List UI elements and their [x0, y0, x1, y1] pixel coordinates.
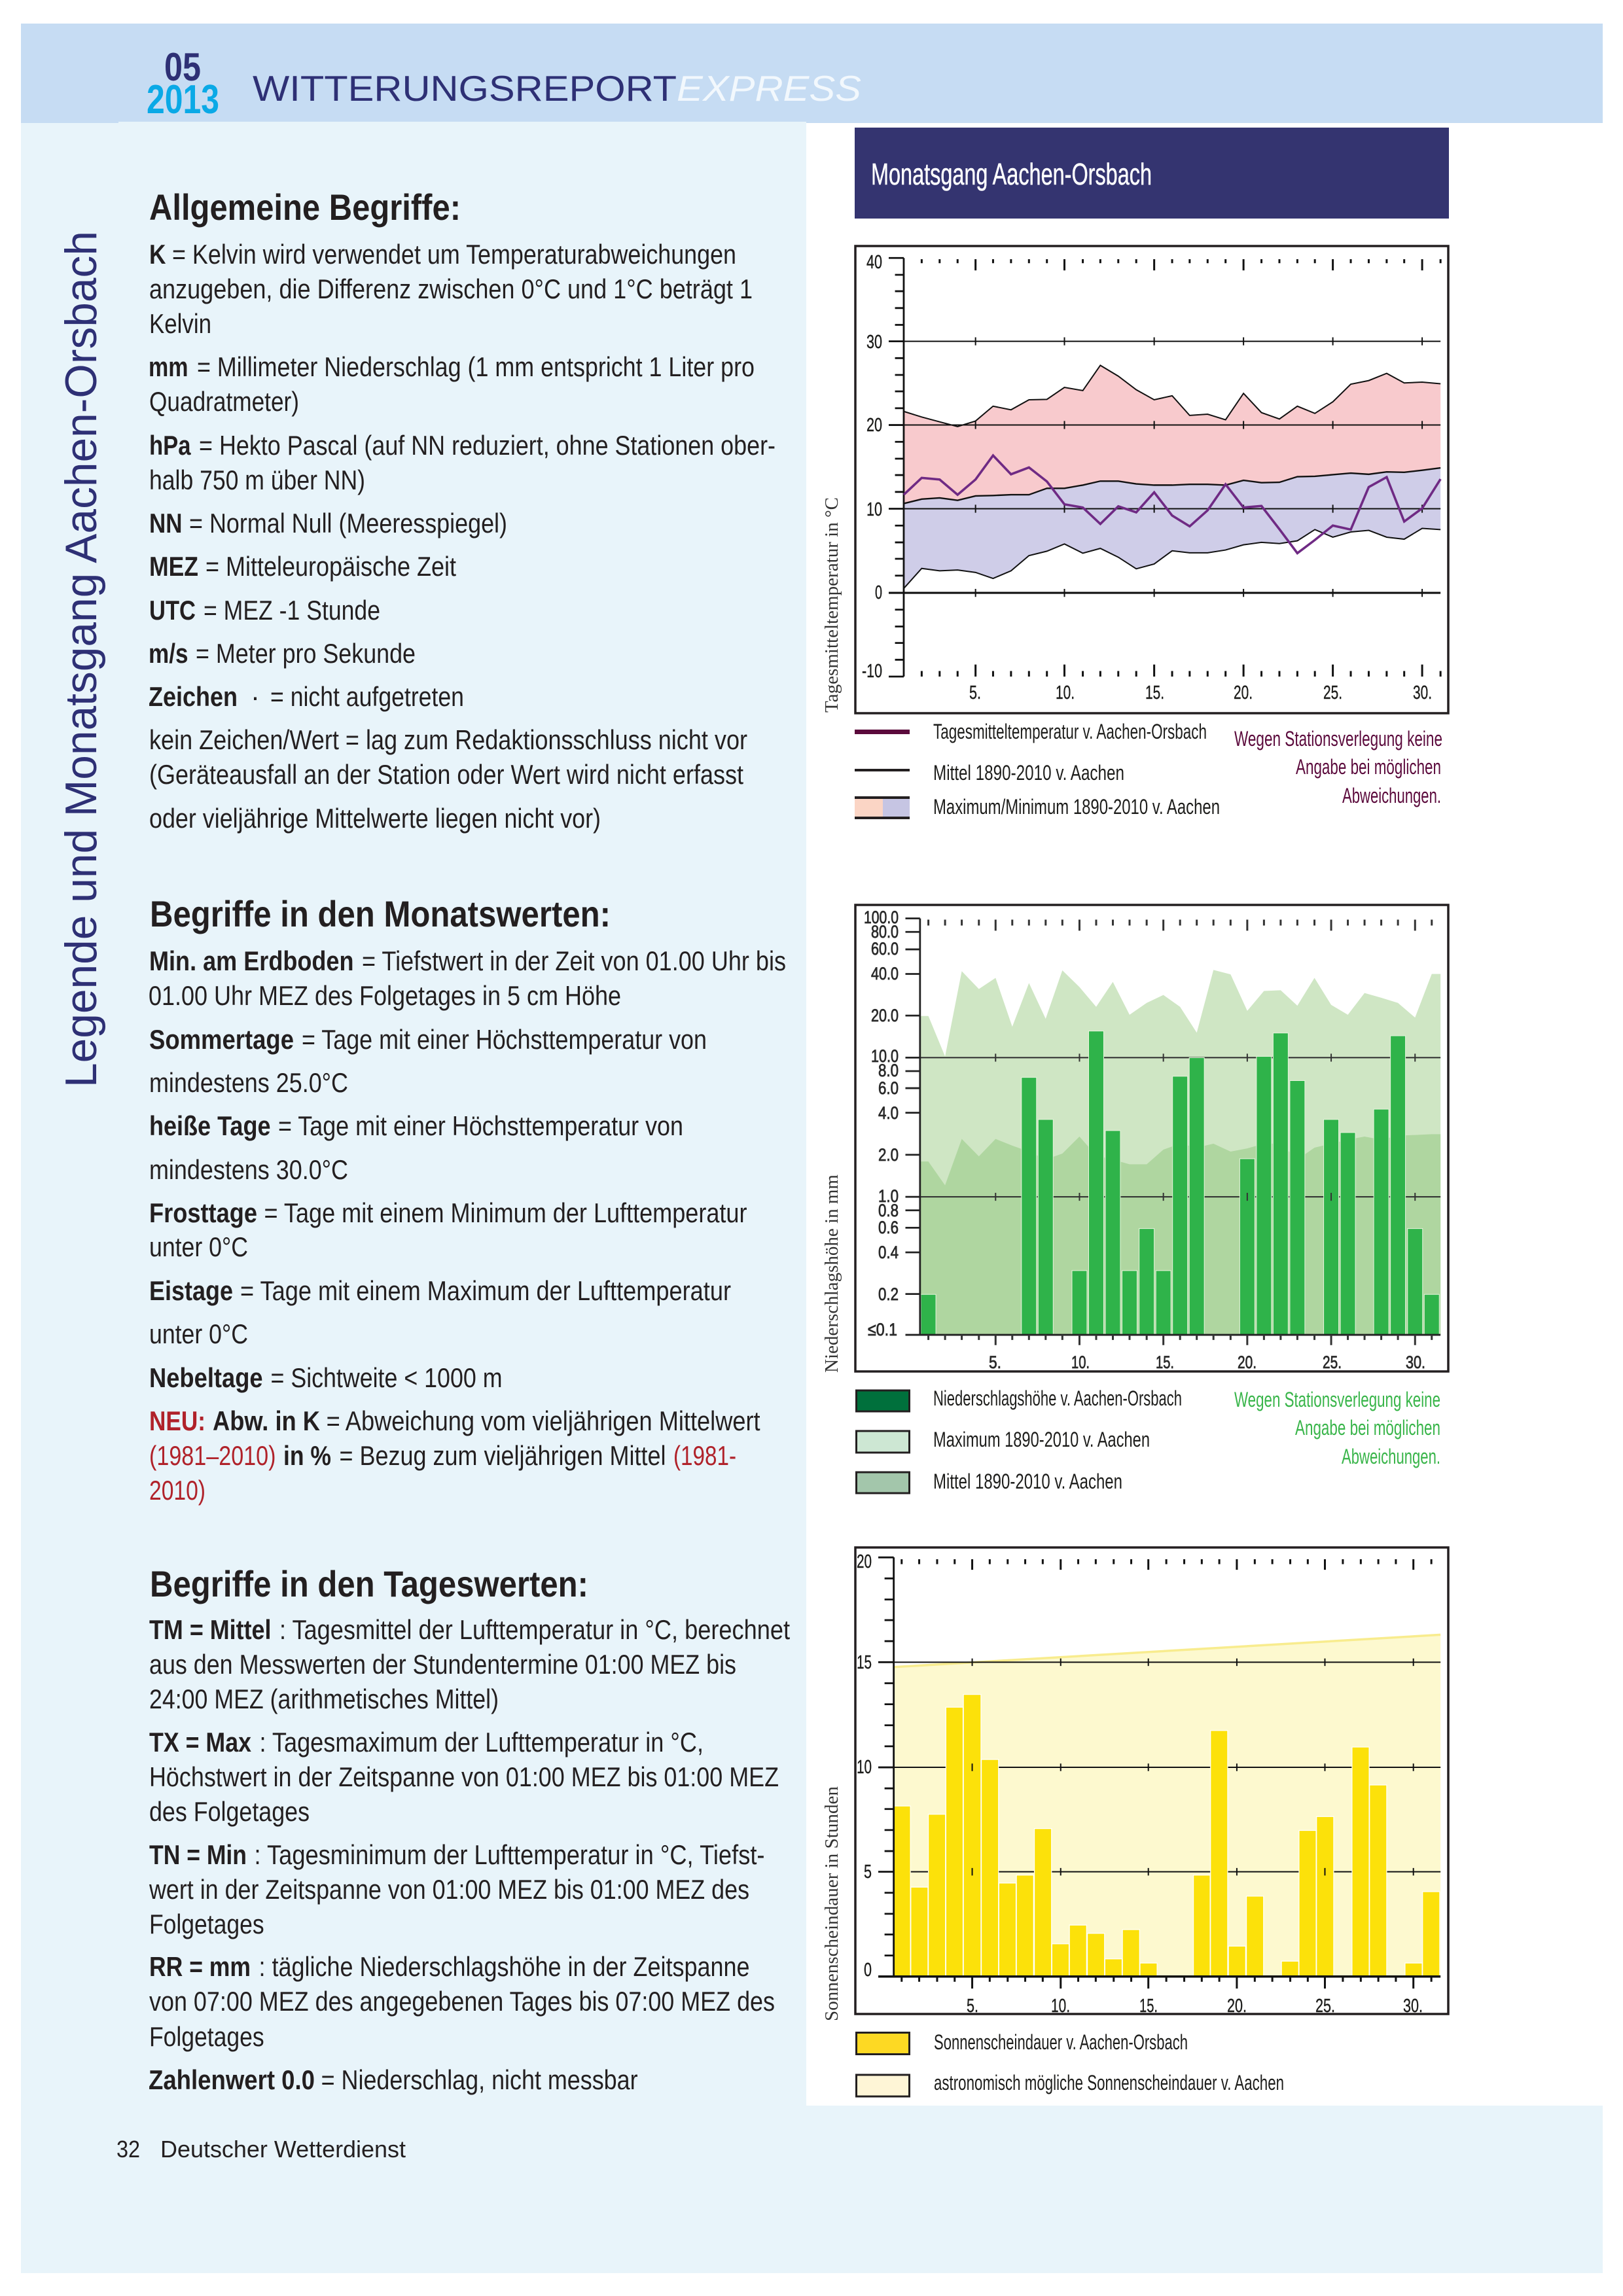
x axis labels: 15.: [1145, 682, 1164, 703]
note: precipitation chart: [1234, 1388, 1440, 1468]
term: TM: aus den Messwerten der Stundentermine 01:00 MEZ bis: [149, 1649, 736, 1680]
term: K: = Kelvin wird verwendet um Temperaturabweichungen: [172, 239, 736, 270]
bars: daily sunshine duration: [894, 1695, 1440, 1977]
y axis labels: 0.6: [878, 1218, 899, 1237]
heading: Begriffe in den Tageswerten:: [150, 1563, 588, 1604]
term: Eistage: = Tage mit einem Maximum der Lufttemperatur: [240, 1275, 731, 1306]
legend line: station: [855, 730, 910, 734]
legend swatch: station: [856, 2032, 910, 2055]
x axis labels: 20.: [1234, 682, 1253, 703]
x axis labels: 30.: [1413, 682, 1432, 703]
x axis labels: 20.: [1238, 1352, 1257, 1372]
x axis labels: 5.: [989, 1352, 1001, 1372]
bars: daily precipitation: [921, 1031, 1439, 1335]
term: Eistage: unter 0°C: [149, 1318, 248, 1349]
term: TM: [149, 1614, 790, 1714]
y axis labels: [862, 252, 882, 682]
line: astronomical limit: [894, 1634, 1440, 1667]
chart: Niederschlagshöhe: [822, 905, 1448, 1373]
y axis labels: 40: [866, 252, 882, 273]
legend swatch: astronomical: [856, 2075, 910, 2096]
term: TX: : Tagesmaximum der Lufttemperatur in °C,: [259, 1727, 704, 1757]
term: K: K: [149, 239, 166, 270]
term: TM: : Tagesmittel der Lufttemperatur in °C, berechnet: [279, 1614, 790, 1645]
y axis labels: 0.8: [878, 1201, 899, 1220]
term: m/s: = Meter pro Sekunde: [196, 638, 416, 669]
term: hPa: = Hekto Pascal (auf NN reduziert, ohne Stationen ober-: [199, 430, 776, 461]
y axis labels: 0: [875, 582, 882, 603]
y axis labels: 20: [857, 1551, 872, 1572]
area: astronomically possible sunshine: [894, 1634, 1440, 1977]
note: precipitation chart: Wegen Stationsverlegung keine: [1234, 1388, 1440, 1411]
x axis labels: 5.: [967, 1996, 978, 2017]
term: K: anzugeben, die Differenz zwischen 0°C und 1°C beträgt 1: [149, 274, 753, 304]
legend text: max/min: Maximum/Minimum 1890-2010 v. Aachen: [933, 795, 1220, 819]
term: Sommertage: = Tage mit einer Höchsttemperatur von: [302, 1024, 707, 1055]
heading: Begriffe in den Monatswerten:: [150, 893, 611, 934]
y axis labels: 0.4: [878, 1243, 899, 1262]
y axis labels: 15: [857, 1652, 872, 1673]
report title: WITTERUNGSREPORT: [253, 68, 677, 109]
x axis labels: 10.: [1056, 682, 1075, 703]
x axis labels: 25.: [1315, 1996, 1335, 2017]
term: Sommertage: mindestens 25.0°C: [149, 1067, 348, 1098]
term: K: Kelvin: [149, 308, 211, 339]
issue year: 2013: [147, 77, 219, 122]
term: NEU Abweichung: = Abweichung vom vieljährigen Mittelwert: [327, 1405, 760, 1436]
legend text: station: Sonnenscheindauer v. Aachen-Orsbach: [934, 2030, 1188, 2054]
x axis labels: 10.: [1051, 1996, 1070, 2017]
legend swatch: station: [856, 1390, 910, 1411]
term: Frosttage: unter 0°C: [149, 1231, 248, 1262]
term: Min. am Erdboden: [149, 945, 786, 1011]
x axis labels: [989, 1352, 1425, 1372]
term: RR: von 07:00 MEZ des angegebenen Tages bis 07:00 MEZ des: [149, 1986, 775, 2017]
term: TN: wert in der Zeitspanne von 01:00 MEZ bis 01:00 MEZ des: [149, 1874, 749, 1905]
term: Zahlenwert: [149, 2064, 638, 2095]
x axis labels: 30.: [1403, 1996, 1423, 2017]
y axis title: Sonnenscheindauer in Stunden: [822, 1786, 842, 2021]
legend text: station: Tagesmitteltemperatur v. Aachen-Orsbach: [933, 720, 1207, 743]
term: mm: Quadratmeter): [149, 386, 299, 417]
note: temperature chart: Angabe bei möglichen: [1296, 755, 1441, 779]
legend text: station: Niederschlagshöhe v. Aachen-Orsbach: [933, 1386, 1182, 1410]
vertical side title: Legende und Monatsgang Aachen-Orsbach: [56, 231, 106, 1087]
y axis labels: 5: [864, 1862, 872, 1882]
term: NEU Abweichung: Abw. in K: [213, 1405, 320, 1436]
term: Nebeltage: [149, 1362, 503, 1393]
term: TX: des Folgetages: [149, 1796, 310, 1827]
term: NEU Abweichung: (1981-: [673, 1440, 736, 1471]
line: min 1890-2010: [904, 529, 1440, 588]
y axis labels: ≤0.1: [868, 1320, 897, 1339]
area: max to mean: [904, 365, 1440, 504]
term: Zeichen: [149, 681, 464, 712]
term: TX: TX = Max: [149, 1727, 252, 1757]
term: TM: TM = Mittel: [149, 1614, 271, 1645]
term: NN: = Normal Null (Meeresspiegel): [189, 508, 507, 539]
term: Zeichen: = nicht aufgetreten: [270, 681, 464, 712]
y axis labels: [864, 908, 899, 1339]
term: NEU Abweichung: in %: [283, 1440, 331, 1471]
x axis labels: 10.: [1071, 1352, 1090, 1372]
y axis labels: 10: [857, 1757, 872, 1778]
term: heiße Tage: heiße Tage: [149, 1110, 271, 1141]
term: NEU Abweichung: [149, 1405, 760, 1506]
term: UTC: = MEZ -1 Stunde: [204, 595, 380, 626]
term: kein Zeichen: kein Zeichen/Wert = lag zum Redaktionsschluss nicht vor: [149, 724, 747, 755]
term: RR: [149, 1951, 775, 2052]
term: NEU Abweichung: 2010): [149, 1475, 205, 1506]
y axis title: Niederschlagshöhe in mm: [822, 1174, 842, 1373]
y axis labels: 30: [866, 332, 882, 353]
term: Min. am Erdboden: 01.00 Uhr MEZ des Folgetages in 5 cm Höhe: [149, 980, 621, 1011]
term: Sommertage: [149, 1024, 707, 1098]
x axis labels: 15.: [1139, 1996, 1158, 2017]
legend text: maximum: Maximum 1890-2010 v. Aachen: [933, 1428, 1150, 1451]
term: RR: : tägliche Niederschlagshöhe in der Zeitspanne: [259, 1951, 750, 1982]
issue month: 05: [164, 45, 201, 89]
term: RR: RR = mm: [149, 1951, 251, 1982]
banner: Monatsgang: [855, 128, 1449, 219]
y axis labels: 40.0: [871, 964, 899, 983]
legend text: mean: Mittel 1890-2010 v. Aachen: [933, 1470, 1122, 1493]
term: hPa: hPa: [149, 430, 191, 461]
term: Sommertage: Sommertage: [149, 1024, 294, 1055]
term: NEU Abweichung: = Bezug zum vieljährigen Mittel: [339, 1440, 666, 1471]
precipitation plot area: [906, 919, 1440, 1345]
term: TM: 24:00 MEZ (arithmetisches Mittel): [149, 1684, 499, 1714]
term: mm: = Millimeter Niederschlag (1 mm entspricht 1 Liter pro: [197, 351, 755, 382]
y axis labels: 4.0: [878, 1103, 899, 1123]
legend: temperature chart: [855, 720, 1220, 819]
term: TN: [149, 1839, 764, 1939]
term: TN: : Tagesminimum der Lufttemperatur in °C, Tiefst-: [254, 1839, 764, 1870]
x axis labels: 30.: [1406, 1352, 1425, 1372]
area: mean: [920, 1134, 1440, 1335]
chart: Sonnenscheindauer: [822, 1547, 1448, 2021]
y axis labels: 100.0: [864, 908, 899, 927]
note: precipitation chart: Angabe bei möglichen: [1295, 1416, 1440, 1439]
line: max 1890-2010: [904, 365, 1440, 427]
y axis labels: 60.0: [871, 939, 899, 959]
panel: Begriffe in den Tageswerten: [149, 1563, 790, 2095]
legend swatch: max/min: [855, 796, 910, 819]
term: heiße Tage: mindestens 30.0°C: [149, 1154, 348, 1185]
temperature plot area: [889, 258, 1440, 677]
y axis labels: 1.0: [878, 1186, 899, 1206]
y axis labels: [857, 1551, 872, 1981]
term: NEU Abweichung: NEU:: [149, 1405, 205, 1436]
report title express: EXPRESS: [677, 68, 861, 109]
heading: Allgemeine Begriffe:: [149, 186, 461, 228]
x axis labels: 25.: [1323, 682, 1342, 703]
term: mm: mm: [149, 351, 188, 382]
legend swatch: maximum: [856, 1431, 910, 1453]
term: Frosttage: Frosttage: [149, 1197, 257, 1228]
term: TX: Höchstwert in der Zeitspanne von 01:00 MEZ bis 01:00 MEZ: [149, 1761, 779, 1792]
banner: Monatsgang: Monatsgang Aachen-Orsbach: [871, 157, 1152, 191]
term: NEU Abweichung: (1981–2010): [149, 1440, 276, 1471]
legend line: mean: [855, 769, 910, 771]
y axis labels: 20.0: [871, 1006, 899, 1025]
footer: 32: [116, 2136, 140, 2163]
sunshine plot area: [878, 1557, 1440, 1988]
term: Nebeltage: Nebeltage: [149, 1362, 263, 1393]
term: Zahlenwert: = Niederschlag, nicht messbar: [321, 2064, 638, 2095]
y axis labels: 10: [866, 499, 882, 520]
term: kein Zeichen: [149, 724, 747, 834]
y axis title: Tagesmitteltemperatur in °C: [822, 497, 842, 713]
header band: [21, 24, 1603, 123]
term: Zahlenwert: Zahlenwert 0.0: [149, 2064, 315, 2095]
y axis labels: 6.0: [878, 1078, 899, 1098]
legend: precipitation chart: [856, 1386, 1182, 1493]
term: Eistage: Eistage: [149, 1275, 233, 1306]
x axis labels: [967, 1996, 1423, 2017]
term: UTC: [149, 595, 380, 626]
term: Min. am Erdboden: = Tiefstwert in der Zeit von 01.00 Uhr bis: [362, 945, 786, 976]
y axis labels: 2.0: [878, 1145, 899, 1165]
legend text: mean: Mittel 1890-2010 v. Aachen: [933, 761, 1124, 785]
line: mean 1890-2010: [904, 468, 1440, 504]
footer: Deutscher Wetterdienst: [160, 2136, 406, 2163]
term: Zeichen: ·: [251, 681, 260, 712]
term: TN: TN = Min: [149, 1839, 247, 1870]
term: MEZ: MEZ: [149, 551, 198, 582]
note: precipitation chart: Abweichungen.: [1342, 1445, 1440, 1468]
term: kein Zeichen: (Geräteausfall an der Station oder Wert wird nicht erfasst: [149, 759, 743, 790]
term: hPa: halb 750 m über NN): [149, 465, 365, 495]
y axis labels: 10.0: [871, 1046, 899, 1066]
term: heiße Tage: = Tage mit einer Höchsttemperatur von: [278, 1110, 683, 1141]
x axis labels: 25.: [1323, 1352, 1342, 1372]
term: Zeichen: Zeichen: [149, 681, 238, 712]
term: MEZ: = Mitteleuropäische Zeit: [205, 551, 456, 582]
term: Min. am Erdboden: Min. am Erdboden: [149, 945, 353, 976]
term: m/s: m/s: [149, 638, 188, 669]
area: mean to min: [904, 468, 1440, 588]
term: TX: [149, 1727, 779, 1827]
y axis labels: 0.2: [878, 1284, 899, 1304]
term: Nebeltage: = Sichtweite < 1000 m: [271, 1362, 503, 1393]
term: kein Zeichen: oder vieljährige Mittelwerte liegen nicht vor): [149, 803, 601, 834]
line: station daily mean temperature: [904, 455, 1440, 553]
term: K: [149, 239, 753, 339]
legend text: astronomical: astronomisch mögliche Sonnenscheindauer v. Aachen: [934, 2071, 1284, 2094]
y axis labels: 20: [866, 415, 882, 436]
y axis labels: 8.0: [878, 1061, 899, 1080]
term: UTC: UTC: [149, 595, 196, 626]
term: NN: NN: [149, 508, 182, 539]
legend swatch: mean: [856, 1472, 910, 1493]
y axis labels: 80.0: [871, 922, 899, 942]
area: maximum: [920, 970, 1440, 1335]
x axis labels: 5.: [969, 682, 981, 703]
term: TN: Folgetages: [149, 1909, 264, 1939]
term: mm: [149, 351, 755, 417]
note: temperature chart: [1234, 727, 1442, 807]
note: temperature chart: Abweichungen.: [1342, 784, 1441, 807]
y axis labels: -10: [862, 661, 882, 682]
panel: allgemeine Begriffe: [149, 186, 776, 834]
term: Eistage: [149, 1275, 731, 1349]
term: RR: Folgetages: [149, 2021, 264, 2052]
term: hPa: [149, 430, 776, 495]
y axis labels: 0: [864, 1960, 872, 1981]
note: temperature chart: Wegen Stationsverlegung keine: [1234, 727, 1442, 751]
x axis labels: 15.: [1156, 1352, 1174, 1372]
term: Frosttage: = Tage mit einem Minimum der Lufttemperatur: [264, 1197, 747, 1228]
legend: sunshine chart: [856, 2030, 1284, 2096]
term: Frosttage: [149, 1197, 747, 1262]
panel: Begriffe in den Monatswerten: [149, 893, 786, 1506]
chart: Tagesmitteltemperatur: [822, 246, 1448, 713]
x axis labels: 20.: [1227, 1996, 1247, 2017]
x axis labels: [969, 682, 1432, 703]
term: heiße Tage: [149, 1110, 683, 1185]
